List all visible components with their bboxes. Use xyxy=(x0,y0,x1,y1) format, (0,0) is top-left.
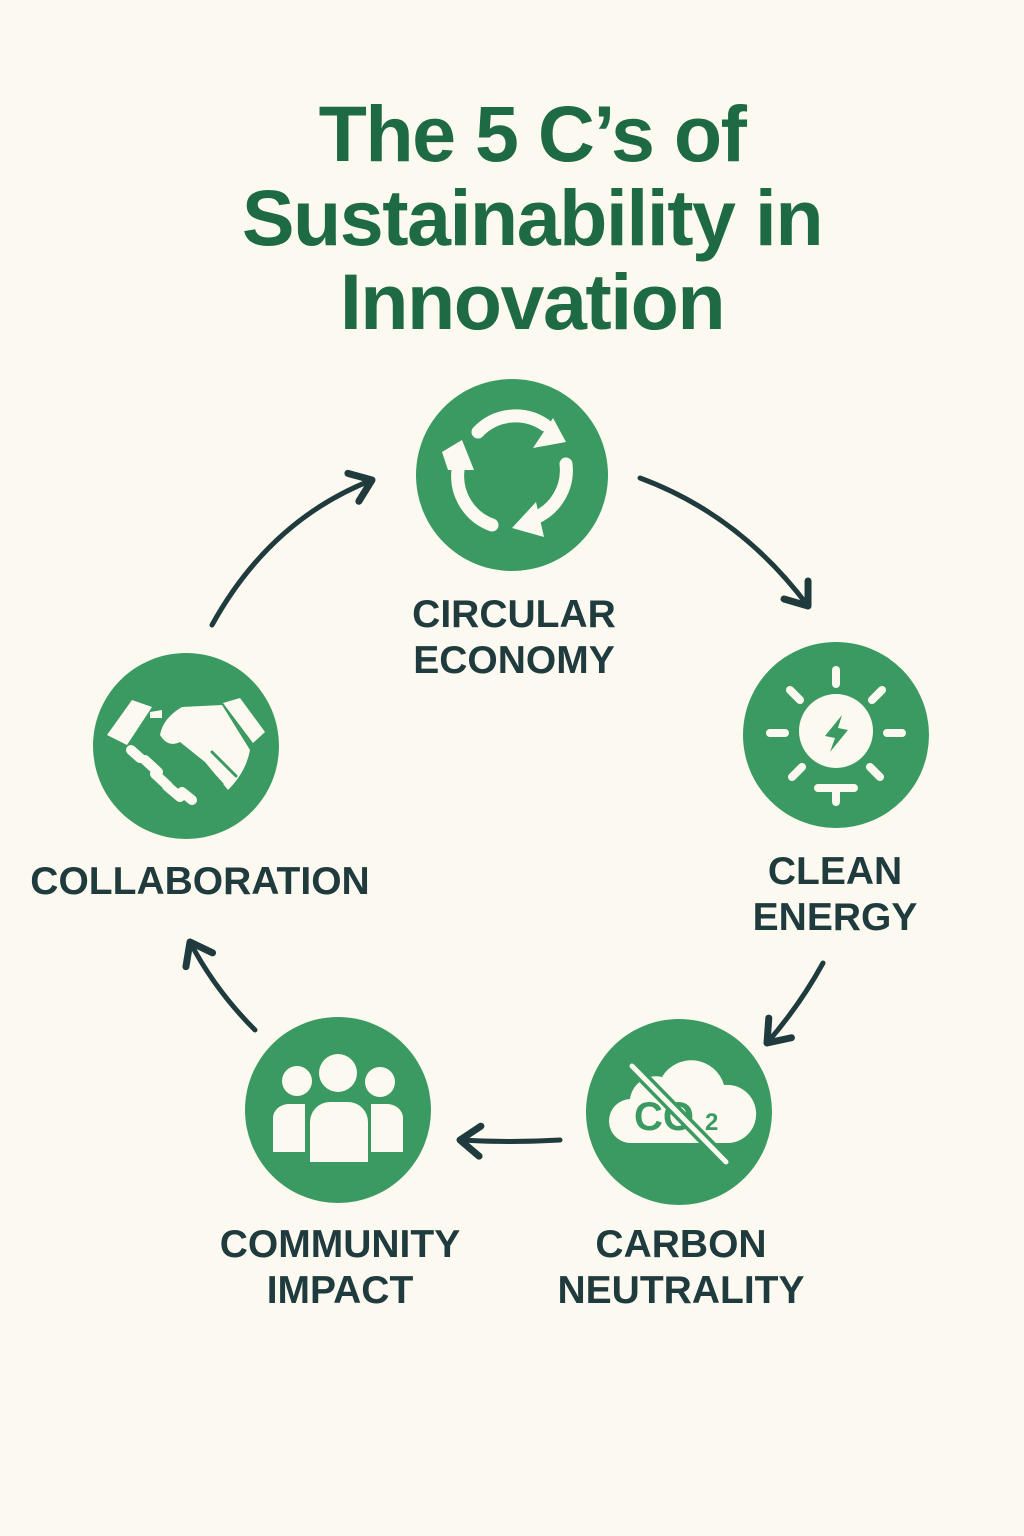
label: circular economy: ECONOMY xyxy=(413,639,615,682)
label: circular economy: CIRCULAR xyxy=(412,593,616,636)
arrow: clean energy to carbon neutrality xyxy=(767,963,823,1043)
arrow: carbon neutrality to community impact xyxy=(460,1140,560,1142)
label: circular economy xyxy=(412,593,616,682)
label: collaboration: COLLABORATION xyxy=(30,860,370,903)
title: Sustainability in xyxy=(242,173,822,262)
arrow: community impact to collaboration xyxy=(190,942,255,1030)
label: community impact: COMMUNITY xyxy=(220,1223,460,1266)
icon: carbon neutrality cloud: 2 xyxy=(705,1109,718,1136)
label: carbon neutrality xyxy=(558,1223,804,1312)
icon: circular economy recycle xyxy=(416,379,608,571)
icon: collaboration handshake xyxy=(93,653,279,839)
label: carbon neutrality: CARBON xyxy=(595,1223,767,1266)
title: Innovation xyxy=(340,257,724,346)
icon: carbon neutrality cloud: CO xyxy=(634,1095,694,1139)
title xyxy=(242,89,822,346)
label: clean energy: ENERGY xyxy=(753,896,917,939)
label: carbon neutrality: NEUTRALITY xyxy=(558,1269,804,1312)
icon: clean energy sun xyxy=(743,642,929,828)
title: The 5 C’s of xyxy=(319,89,745,178)
arrow: collaboration to circular economy xyxy=(212,480,372,625)
label: clean energy xyxy=(753,850,917,939)
label: community impact xyxy=(220,1223,460,1312)
arrow: circular economy to clean energy xyxy=(640,478,808,606)
label: clean energy: CLEAN xyxy=(768,850,902,893)
icon: carbon neutrality cloud xyxy=(586,1019,772,1205)
label: community impact: IMPACT xyxy=(267,1269,413,1312)
icon: community impact people xyxy=(245,1017,431,1203)
